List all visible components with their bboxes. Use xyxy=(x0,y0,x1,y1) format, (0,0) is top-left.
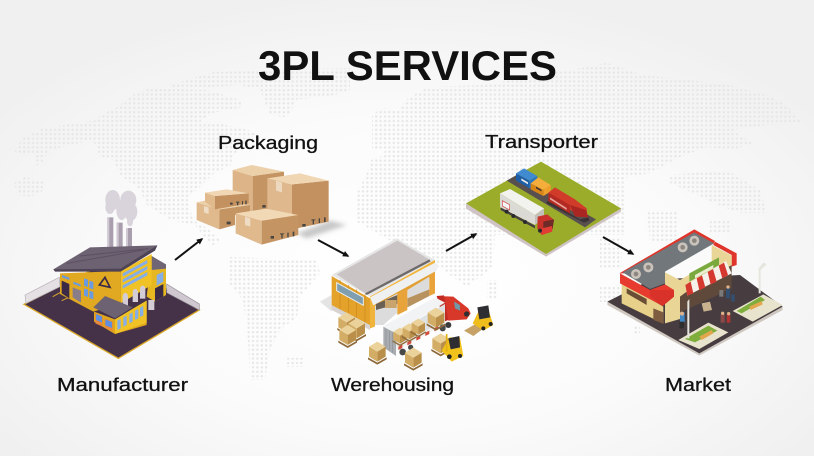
label: Werehousing: Werehousing xyxy=(331,374,454,395)
label: Market: Market xyxy=(665,374,731,395)
icon: shop xyxy=(607,229,783,356)
title: 3PL SERVICES xyxy=(258,42,557,89)
icon: warehouse xyxy=(320,238,493,371)
arrow: packaging to warehousing xyxy=(318,240,348,256)
icon: cardboard boxes xyxy=(197,165,347,245)
icon: factory xyxy=(24,190,199,358)
label: Packaging: Packaging xyxy=(218,132,318,153)
label: Transporter: Transporter xyxy=(485,131,598,152)
icon: train and truck on green platform xyxy=(466,162,621,257)
dotted world map xyxy=(14,63,802,380)
label: Manufacturer: Manufacturer xyxy=(57,374,188,395)
arrow: transporter to market xyxy=(603,237,633,254)
arrow: manufacturer to packaging xyxy=(175,239,202,260)
arrow: warehousing to transporter xyxy=(446,234,476,251)
